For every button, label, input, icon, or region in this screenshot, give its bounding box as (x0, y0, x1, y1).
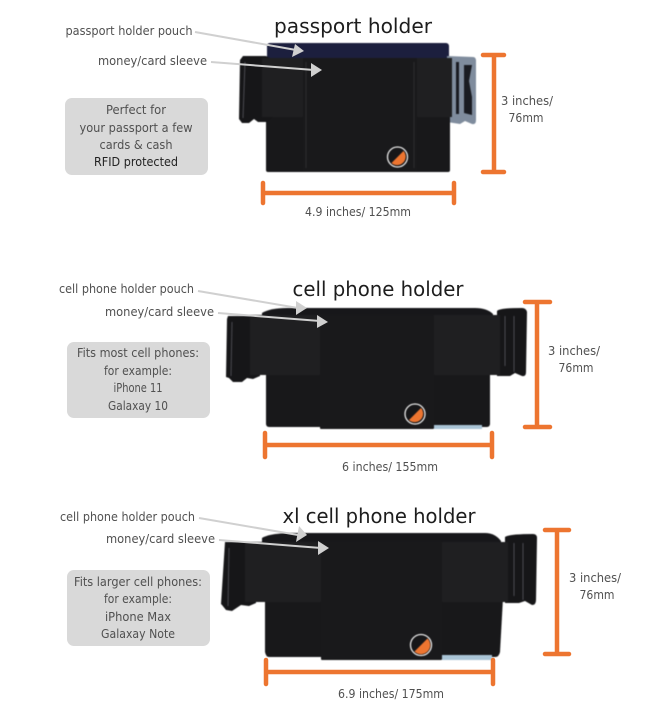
callout: passport: cards & cash (100, 138, 172, 152)
dimension: width passport (263, 183, 454, 219)
dimension: height cell phone: 3 inches/ (548, 344, 601, 358)
callout: xl cell phone: Galaxay Note (101, 627, 175, 641)
photo: passport holder (239, 43, 476, 172)
label: cell phone holder pouch 2: cell phone holder pouch (60, 510, 195, 524)
callout: passport: Perfect for (106, 103, 166, 117)
dimension: width cell phone (265, 433, 492, 474)
callout: passport (65, 98, 208, 175)
callout: passport: RFID protected (94, 155, 178, 169)
dimension: width cell phone: 6 inches/ 155mm (342, 460, 438, 474)
callout: xl cell phone: iPhone Max (105, 610, 171, 624)
title: passport holder: passport holder (274, 14, 433, 38)
arrow: sleeve 1 (211, 62, 322, 77)
dimension: height xl (545, 530, 622, 654)
callout: cell phone (67, 342, 210, 418)
callout: xl cell phone (67, 570, 210, 646)
dimension: width xl: 6.9 inches/ 175mm (338, 687, 444, 701)
photo: xl cell phone holder (221, 533, 537, 660)
icon: logo (388, 147, 408, 167)
arrow: sleeve 2 (218, 313, 328, 328)
callout: cell phone: Fits most cell phones: (77, 346, 199, 360)
callout: cell phone: for example: (104, 364, 172, 378)
label: money card sleeve 1: money/card sleeve (98, 54, 207, 68)
label: money card sleeve 3: money/card sleeve (106, 532, 215, 546)
callout: cell phone: iPhone 11 (114, 381, 162, 395)
label: cell phone holder pouch 1: cell phone holder pouch (59, 282, 194, 296)
dimension: width passport: 4.9 inches/ 125mm (305, 205, 411, 219)
callout: xl cell phone: Fits larger cell phones: (74, 575, 202, 589)
photo: cell phone holder (226, 308, 527, 429)
icon: logo (405, 404, 425, 424)
label: passport holder pouch: passport holder pouch (66, 24, 192, 38)
callout: cell phone: Galaxay 10 (108, 399, 168, 413)
arrow: cell pouch (198, 291, 307, 315)
dimension: height passport (483, 55, 554, 172)
dimension: height cell phone: 76mm (558, 361, 594, 375)
dimension: height xl: 3 inches/ (569, 571, 622, 585)
label: money card sleeve 2: money/card sleeve (105, 305, 214, 319)
dimension: height cell phone (525, 302, 601, 427)
dimension: height passport: 76mm (508, 111, 544, 125)
title: xl cell phone holder: xl cell phone holder (282, 504, 476, 528)
dimension: width xl (266, 660, 493, 701)
dimension: height xl: 76mm (580, 588, 614, 602)
dimension: height passport: 3 inches/ (501, 94, 554, 108)
callout: passport: your passport a few (80, 121, 193, 135)
arrow: xl pouch (199, 518, 307, 542)
callout: xl cell phone: for example: (104, 592, 172, 606)
icon: logo (410, 634, 432, 656)
arrow: passport pouch (195, 32, 304, 57)
arrow: sleeve 3 (219, 540, 329, 555)
title: cell phone holder: cell phone holder (292, 277, 464, 301)
